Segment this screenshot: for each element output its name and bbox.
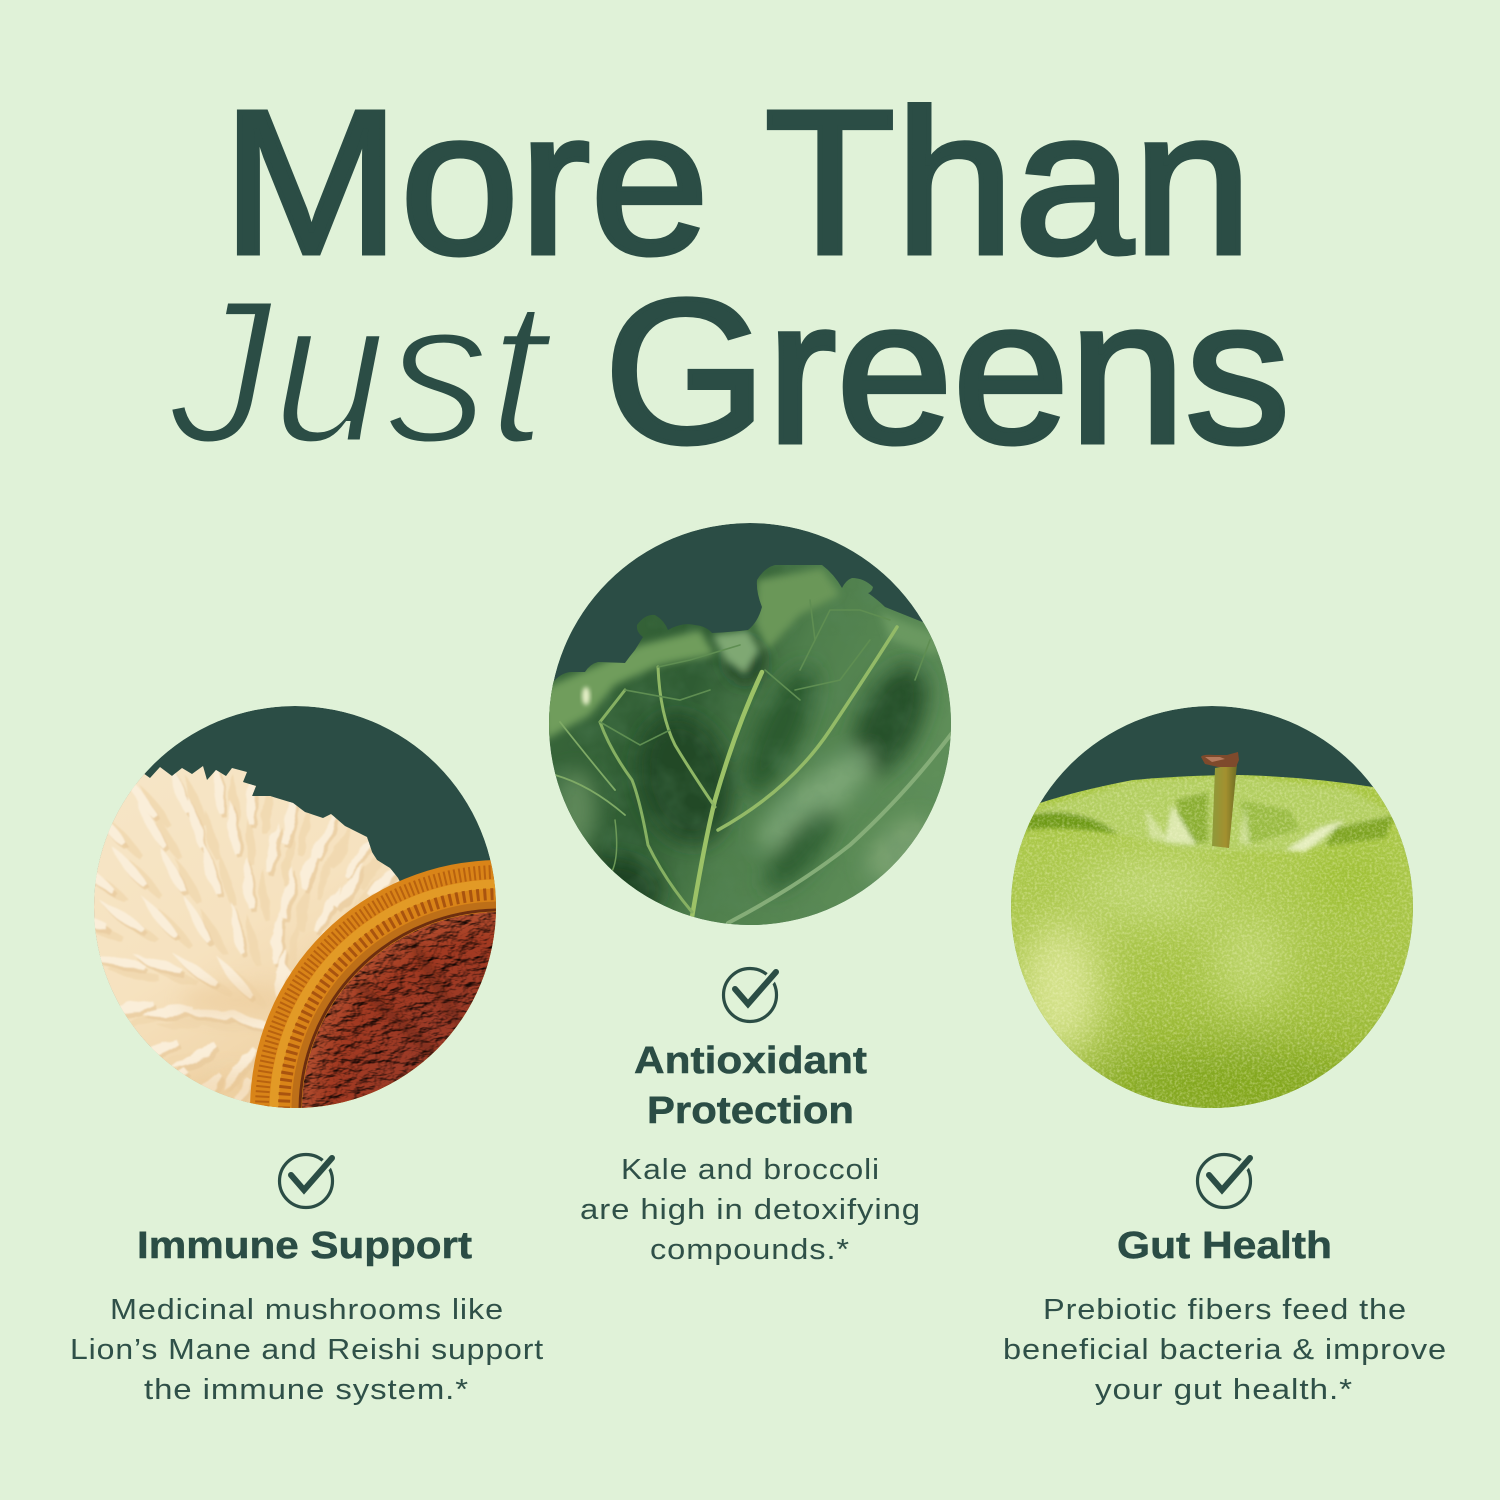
apple tonal areas <box>1018 850 1395 1113</box>
petals <box>94 770 398 1102</box>
veins <box>555 600 952 923</box>
photo: kale leaf <box>540 523 970 940</box>
text: gut health description: beneficial bacteria & improve <box>1003 1334 1447 1366</box>
ruffled edge <box>540 568 950 740</box>
photo: lion's mane and reishi mushrooms <box>94 706 496 1108</box>
heading: antioxidant protection: Protection <box>647 1090 854 1132</box>
heading: gut health: Gut Health <box>1117 1225 1332 1267</box>
text: gut health description: your gut health.* <box>1095 1374 1353 1406</box>
text: antioxidant description <box>580 1154 921 1266</box>
infographic canvas <box>72 102 1445 1405</box>
reishi cap rim <box>250 860 496 1108</box>
panel: immune support <box>72 706 543 1405</box>
title: Greens <box>604 257 1290 486</box>
heading: antioxidant protection: Antioxidant <box>634 1040 867 1082</box>
icon: check mark <box>280 1154 332 1208</box>
apple stem <box>1201 752 1239 848</box>
text: antioxidant description: Kale and broccoli <box>621 1154 880 1186</box>
warm shadow folds <box>182 978 282 1100</box>
text: immune support description <box>70 1294 544 1406</box>
photo: green apple <box>1000 706 1430 1120</box>
text: antioxidant description: are high in detoxifying <box>580 1194 921 1226</box>
reishi red centre <box>302 912 496 1108</box>
text: immune support description: Lion’s Mane and Reishi support <box>70 1334 544 1366</box>
title: Just <box>169 257 554 486</box>
icon: check mark <box>1198 1154 1250 1208</box>
text: gut health description <box>1003 1294 1447 1406</box>
panel: antioxidant protection <box>540 523 970 1266</box>
icon: check mark <box>724 968 776 1022</box>
blotchy tonal areas <box>553 638 945 922</box>
panel: gut health <box>1000 706 1447 1406</box>
text: immune support description: Medicinal mushrooms like <box>110 1294 504 1326</box>
heading: antioxidant protection <box>634 1040 867 1132</box>
title <box>169 68 1290 486</box>
heading: immune support: Immune Support <box>137 1225 472 1267</box>
title: More Than <box>222 68 1252 297</box>
text: immune support description: the immune system.* <box>144 1374 469 1406</box>
reishi growth bands <box>255 865 494 1106</box>
apple dimple <box>1025 776 1395 852</box>
text: gut health description: Prebiotic fibers feed the <box>1043 1294 1407 1326</box>
text: antioxidant description: compounds.* <box>650 1234 850 1266</box>
